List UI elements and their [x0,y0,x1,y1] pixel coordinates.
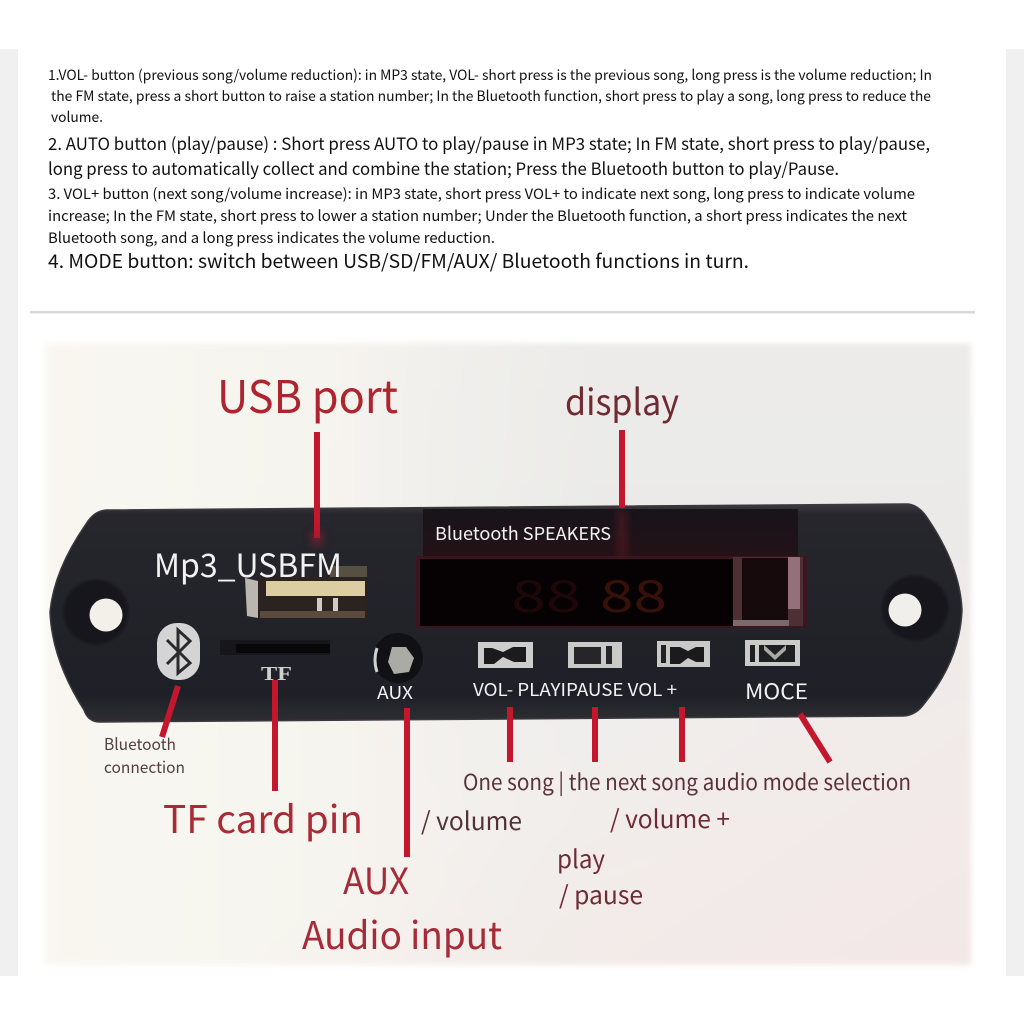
callout labels: Audio input [302,905,502,960]
board labels: AUX [377,679,414,705]
icon: bluetooth badge [157,623,200,680]
instruction 2: long press to automatically collect and combine the station; Press the Bluetooth button to play/Pause. [48,155,839,180]
instruction 2 [48,130,930,180]
TF card slot [220,640,330,685]
board labels: Mp3_USBFM [154,541,342,587]
button: play pause [568,642,622,668]
board labels [154,520,808,706]
callout labels: AUX [343,853,409,905]
callout lines [162,430,830,857]
callout labels: One song | the next song audio mode selection [463,765,911,797]
display window [416,556,807,628]
board labels: MOCE [745,676,808,706]
board labels: VOL- PLAYIPAUSE VOL + [473,676,677,702]
callout labels: TF card pin [163,789,363,844]
callout labels: / volume + [610,800,730,836]
seven segment digits [511,561,667,625]
instruction 1 [48,65,932,127]
button: previous [478,642,533,668]
mounting hole: left [64,580,128,644]
instruction 1: the FM state, press a short button to raise a station number; In the Bluetooth function, short press to play a song, long press to reduce the [51,86,931,106]
callout labels: / pause [559,876,643,912]
USB port [245,566,367,618]
AUX jack [373,633,423,683]
line glow on board [311,510,627,556]
button: mode [745,640,800,666]
instruction 1: 1.VOL- button (previous song/volume reduction): in MP3 state, VOL- short press is the previous song, long press is the volume reduction; In [48,65,932,85]
seven segment digits: 88 [511,561,581,625]
device: module faceplate [50,504,962,722]
callout labels: USB port [217,361,398,426]
instruction 2: 2. AUTO button (play/pause) : Short press AUTO to play/pause in MP3 state; In FM state, short press to play/pause, [48,130,930,155]
instruction 3 [48,183,915,248]
instruction 3: 3. VOL+ button (next song/volume increase): in MP3 state, short press VOL+ to indicate next song, long press to indicate volume [48,183,915,204]
panel: product photo [45,343,971,965]
instruction 1: volume. [51,107,103,127]
instruction 4: 4. MODE button: switch between USB/SD/FM/AUX/ Bluetooth functions in turn. [48,247,749,274]
panel: button instructions [48,65,932,274]
instruction 3: Bluetooth song, and a long press indicates the volume reduction. [48,227,495,248]
callout labels: display [565,374,679,426]
instruction 3: increase; In the FM state, short press to lower a station number; Under the Bluetooth function, a short press indicates the next [48,205,908,226]
TF card slot: TF [261,663,292,685]
board labels: Bluetooth SPEAKERS [435,520,611,546]
callout labels: Bluetooth [104,731,176,755]
callout labels: / volume [421,802,522,838]
seven segment digits: 88 [600,561,667,625]
dark label band [423,509,798,557]
button: next [657,641,710,667]
callout labels [104,361,911,960]
callout labels: connection [104,754,185,778]
divider [30,311,975,314]
callout labels: play [557,840,605,876]
mounting hole: right [882,576,948,640]
